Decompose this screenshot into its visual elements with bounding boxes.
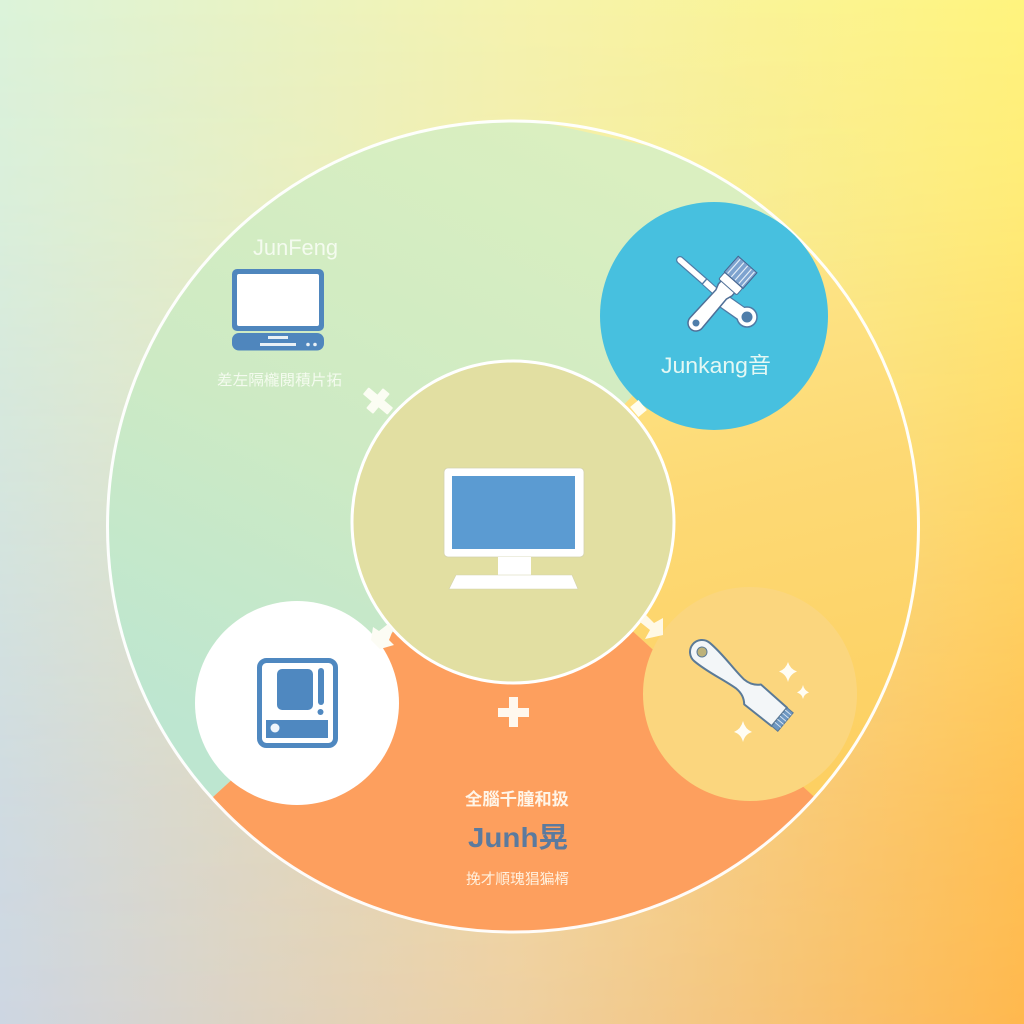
panel: yellow circle with brush icon [643,587,857,801]
screwdriver [680,260,757,327]
outer circle with three sectors [106,120,920,934]
icon: crossed screwdriver and brush [680,256,757,337]
label: Junh: Junh晃 [468,822,568,853]
caption: 差左隔櫳閱積片拓 [217,372,342,389]
icon: desktop monitor [444,468,584,589]
connector: plus top-left [357,381,399,421]
panel: top-left JunFeng block [217,235,342,389]
outer ring [108,121,918,932]
label: lower caption: 挽才順瑰猖猵楈 [466,871,570,888]
connector: top-right [630,400,647,417]
icon: tablet device [260,660,336,746]
sector: yellow [624,348,895,796]
plus sign in orange sector [498,697,529,727]
icon: laptop [232,269,324,350]
panel: white circle with tablet icon [195,601,399,805]
connector: arrow to brush circle [640,615,663,639]
brush [681,256,757,337]
icon: paint brush [684,634,794,732]
sector: orange [213,632,814,930]
connector: arrow to white circle [371,624,394,649]
panel: center circle [352,361,674,683]
panel: top-right blue circle [600,202,828,430]
label: Junkang: Junkang音 [661,353,771,378]
icon: sparkles [734,662,809,742]
label: JunFeng: JunFeng [253,235,338,260]
panel: orange sector text block [465,789,570,888]
sector: green [109,122,779,797]
label: upper caption: 全腦千膧和扱 [465,789,569,809]
